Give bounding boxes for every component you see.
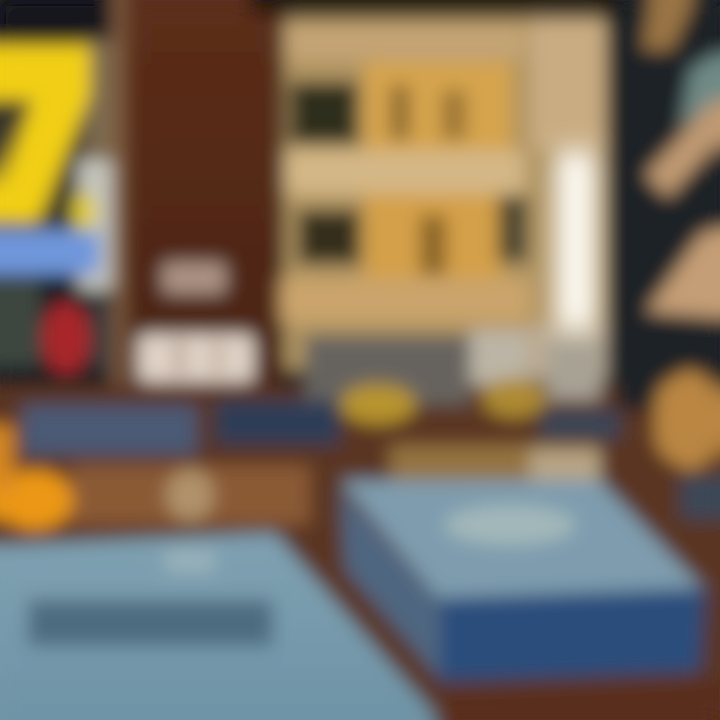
- panel: blue book stack right: [340, 480, 705, 682]
- panel: light blue book bottom left: [0, 533, 440, 720]
- column label text: [138, 262, 254, 382]
- panel: left yellow numeral poster: [0, 0, 118, 374]
- panel: golden bookcase: [280, 18, 606, 380]
- grey objects under bookcase: [305, 330, 600, 424]
- table surface with warm reflections: [70, 445, 600, 525]
- icon: yellow number 7: [0, 45, 96, 232]
- panel: navy books on table: [22, 400, 620, 455]
- panel: right shelf with tan books: [618, 0, 720, 520]
- dark table bottom right: [445, 680, 720, 720]
- panel: brown column: [112, 0, 620, 385]
- white light glow: [556, 150, 596, 330]
- icon: orange object at left: [0, 425, 73, 530]
